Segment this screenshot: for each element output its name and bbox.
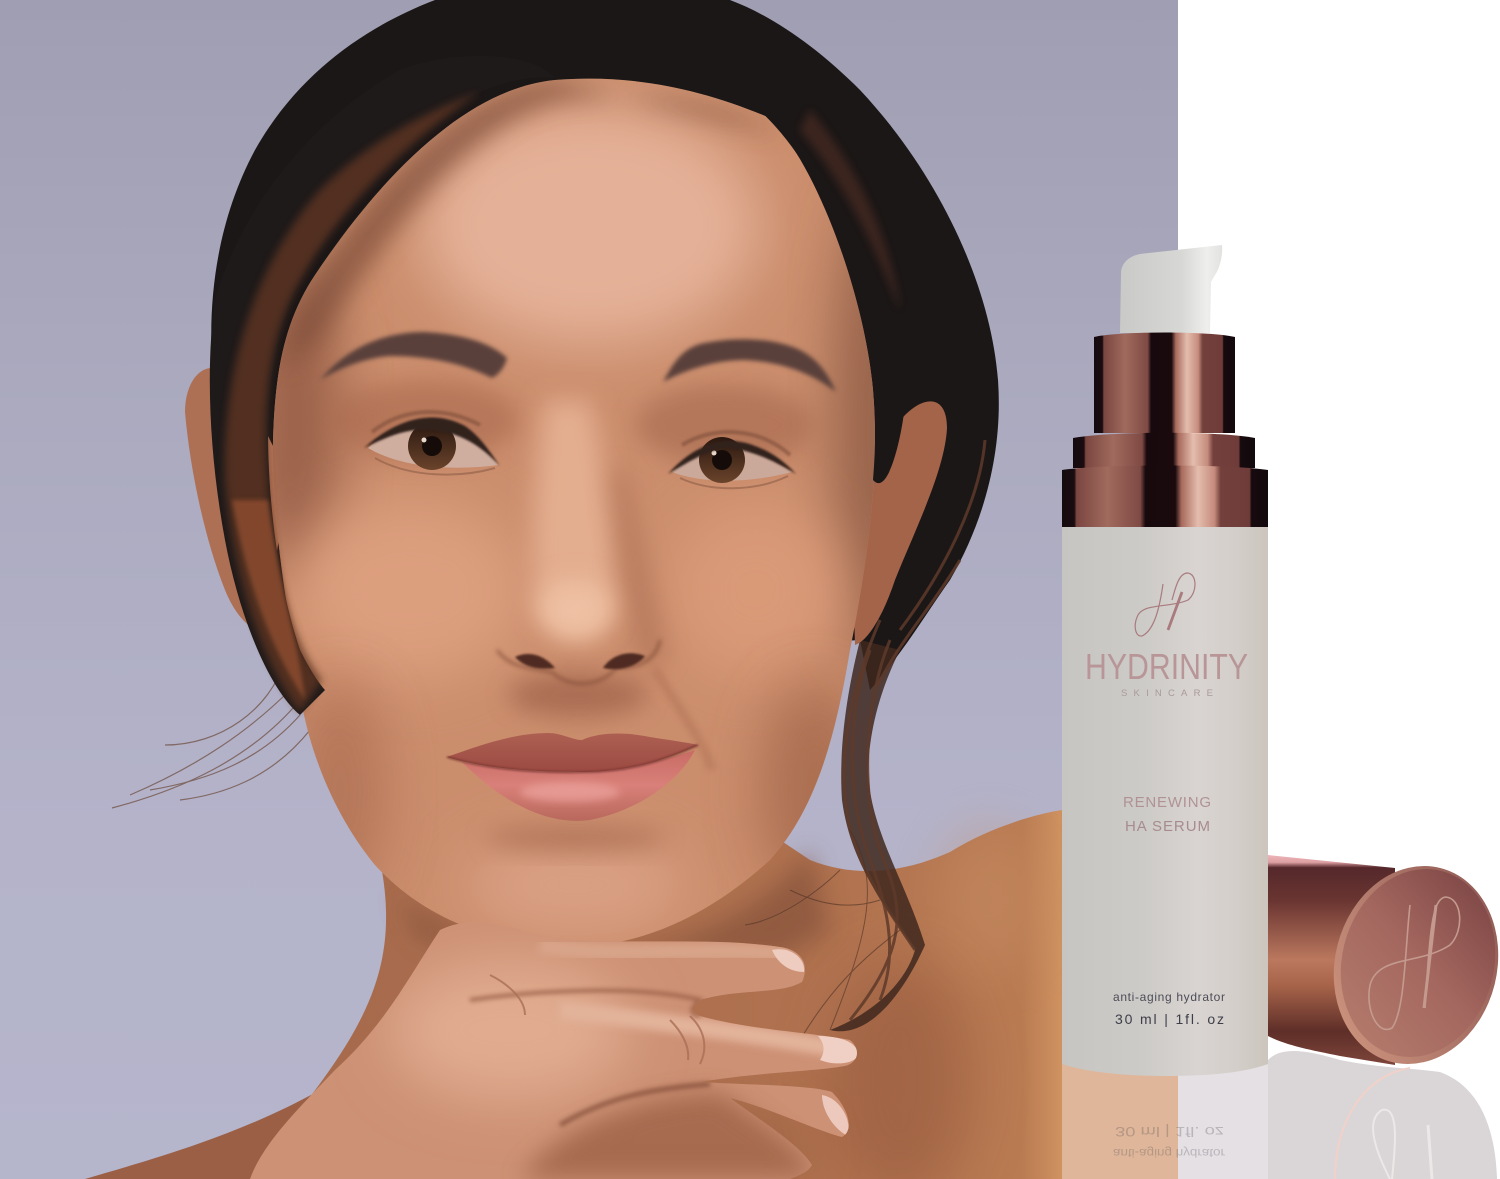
hair over forehead: [210, 56, 985, 1040]
mirrored label: anti-aging hydrator: [1113, 1146, 1225, 1160]
right eyebrow: [663, 339, 836, 392]
lower palm shadow: [520, 1092, 812, 1179]
right eye: [668, 432, 796, 488]
nose side shadow: [610, 470, 668, 670]
hand: [250, 924, 857, 1179]
middle finger light: [560, 1010, 845, 1050]
product descriptor: anti-aging hydrator: [1113, 990, 1225, 1004]
bottle cap: [1268, 848, 1500, 1082]
right ear: [850, 401, 947, 645]
middle nail: [818, 1036, 858, 1063]
index nail: [772, 949, 804, 972]
left shoulder: [85, 1090, 380, 1179]
left nostril: [515, 654, 555, 669]
upper lip: [447, 733, 698, 772]
auburn lower strands: [232, 500, 305, 700]
mirrored label: 30 ml | 1fl. oz: [1115, 1124, 1224, 1140]
lower finger gap: [560, 1084, 710, 1125]
knuckle creases: [490, 975, 704, 1064]
finger gap shadow: [470, 991, 700, 1016]
hairline shadow: [280, 80, 780, 370]
jaw shadow left: [295, 680, 385, 900]
back hair: [211, 0, 999, 700]
ring nail: [822, 1095, 849, 1136]
lip parting: [447, 745, 698, 772]
left eyebrow: [320, 332, 507, 380]
jaw shadow right: [742, 668, 844, 870]
left ear: [185, 368, 290, 632]
cap disc: [1321, 852, 1500, 1074]
bottle reflection: [1062, 1050, 1268, 1179]
lavender backdrop: [0, 0, 1178, 1179]
hand base skin: [250, 924, 857, 1179]
right hair brown strands: [844, 440, 985, 1020]
back of hand light: [390, 960, 630, 1100]
right face shadow: [808, 222, 875, 664]
left temple shadow: [250, 260, 340, 580]
serum bottle: [1062, 245, 1268, 1076]
lower right hair wisp: [830, 640, 925, 1031]
mirrored label: [1113, 1124, 1225, 1160]
hair left sweep: [210, 56, 555, 715]
nose underside: [497, 640, 660, 684]
cap monogram: [1369, 897, 1460, 1029]
bottle body: [1062, 527, 1268, 1076]
nose bridge highlight: [533, 400, 615, 634]
under lip shadow: [485, 824, 665, 852]
product size: 30 ml | 1fl. oz: [1115, 1011, 1224, 1027]
face: [272, 78, 875, 942]
left eye: [364, 412, 500, 475]
middle collar: [1073, 433, 1255, 468]
shoulder and chest: [260, 810, 1062, 1179]
brown highlights: [225, 92, 480, 712]
fine neck strands: [745, 830, 900, 1040]
eye socket shadows: [330, 380, 815, 465]
brand name: HYDRINITY: [1085, 646, 1248, 687]
right cheek glow: [670, 505, 840, 675]
cap reflection: [1268, 1051, 1497, 1179]
wispy hair strands left: [112, 660, 310, 808]
smile line: [655, 670, 712, 770]
lower lip highlight: [520, 782, 620, 802]
cap rim: [1313, 848, 1500, 1082]
hair right sweep: [700, 70, 905, 483]
left cheek glow: [295, 500, 525, 680]
index finger light: [540, 945, 790, 955]
forehead highlight: [420, 105, 760, 345]
nose tip highlight: [539, 580, 611, 640]
pump head: [1120, 245, 1222, 333]
neck shading: [395, 830, 1040, 1179]
skincare line: SKINCARE: [1121, 688, 1213, 699]
product name line 2: HA SERUM: [1125, 818, 1210, 835]
cap cylinder: [1268, 855, 1395, 1065]
monogram logo: [1135, 573, 1195, 636]
lower lip: [462, 750, 695, 821]
lower collar: [1062, 466, 1268, 527]
product name line 1: RENEWING: [1123, 794, 1211, 811]
top collar: [1094, 332, 1235, 433]
under-nose shadow: [508, 673, 648, 717]
face base skin: [272, 78, 875, 942]
right brown sheen: [800, 110, 900, 310]
right nostril: [603, 653, 645, 669]
chin glow: [465, 837, 685, 933]
lips: [447, 733, 698, 821]
